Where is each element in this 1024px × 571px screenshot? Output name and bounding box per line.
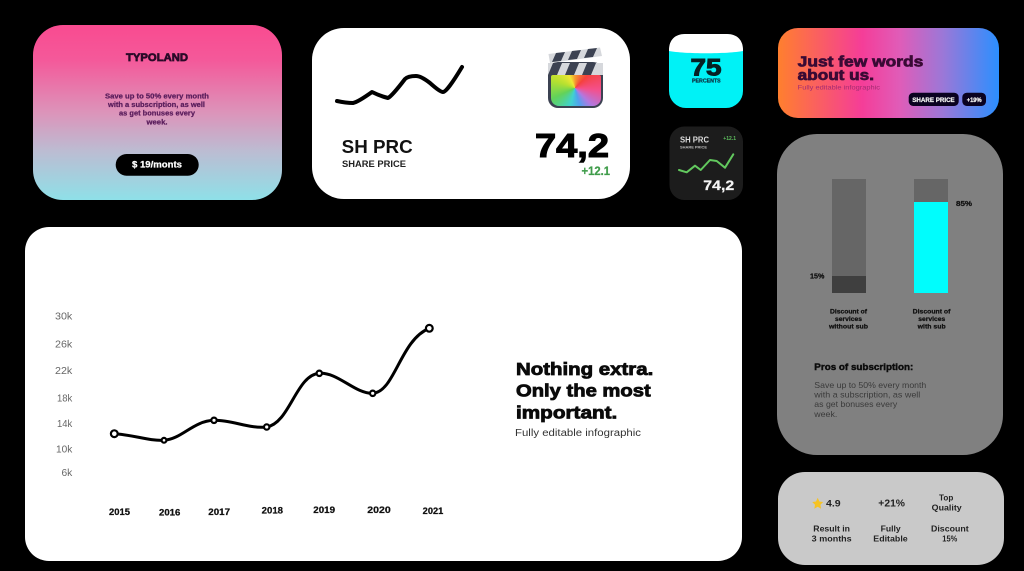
heading: nothing extra: Nothing extra.	[516, 359, 653, 379]
heading: nothing extra: Only the most	[516, 381, 651, 401]
stat: result	[812, 524, 852, 544]
ticker label: SHARE PRICE	[680, 146, 708, 150]
label: without sub: without sub	[828, 323, 868, 330]
x axis labels: 2020	[367, 505, 391, 515]
text block: pros: with a subscription, as well	[813, 390, 920, 400]
text block: pros: Save up to 50% every month	[814, 380, 927, 390]
y axis labels: 6k	[62, 467, 73, 479]
text block: subscription offer: Save up to 50% every month	[105, 92, 209, 100]
icon: clapperboard with colour wheel	[548, 48, 603, 108]
line series	[114, 328, 429, 440]
text block: pros: as get bonuses every	[814, 399, 898, 409]
pill: share price	[909, 93, 959, 106]
y axis labels: 10k	[56, 444, 73, 456]
y axis labels	[55, 310, 73, 479]
stat: top quality: Top	[939, 493, 953, 503]
label: without sub	[828, 309, 868, 330]
y axis labels: 26k	[55, 339, 73, 351]
ticker label	[680, 135, 709, 150]
panel: typoland pricing	[33, 25, 282, 200]
x axis labels: 2018	[262, 506, 283, 516]
bar: with sub 85%	[914, 179, 973, 293]
y axis labels: 22k	[55, 365, 73, 377]
panel: subscription bars	[777, 134, 1003, 455]
icon: star	[812, 498, 823, 509]
stat: discount	[931, 524, 969, 544]
panel: dark share price widget	[670, 126, 743, 200]
panel: about us gradient	[778, 28, 999, 118]
subheading: Fully editable infographic	[515, 428, 641, 439]
y axis labels: 14k	[57, 418, 73, 430]
stat: editable: Editable	[873, 534, 908, 544]
text block: subscription offer: as get bonuses every	[119, 109, 196, 118]
y axis labels: 18k	[57, 393, 73, 405]
x axis labels: 2016	[159, 508, 180, 518]
green sparkline	[679, 154, 733, 172]
stat: result: Result in	[813, 524, 850, 534]
stat: discount: 15%	[942, 534, 958, 544]
text block: pros: week.	[813, 409, 837, 419]
text block: pros	[813, 380, 927, 419]
text block: subscription offer: with a subscription, as well	[107, 100, 205, 109]
stat: top quality: Quality	[932, 503, 962, 513]
heading: just few words about us: Just few words	[798, 55, 923, 71]
panel: 75 percents	[669, 34, 743, 108]
heading: nothing extra	[516, 359, 653, 422]
heading: just few words about us: about us.	[798, 68, 874, 84]
value: 75: 75	[690, 54, 722, 82]
share price value: 74,2	[535, 127, 609, 164]
bar: without sub 15%	[810, 179, 866, 293]
ticker label	[342, 137, 413, 170]
x axis labels: 2017	[208, 507, 230, 517]
value: 74,2	[703, 177, 735, 193]
heading: nothing extra: important.	[516, 402, 617, 422]
bar: with sub 85%: 85%	[956, 201, 973, 208]
pill: +19%	[962, 93, 986, 106]
price button: $ 19/monts	[132, 160, 182, 170]
label: without sub: services	[835, 316, 862, 323]
subheading: Fully editable infographic	[798, 84, 881, 92]
heading: just few words about us	[798, 55, 923, 84]
y axis labels: 30k	[55, 310, 73, 322]
price button	[116, 154, 199, 176]
x axis labels	[109, 505, 443, 518]
label: without sub: Discount of	[830, 309, 868, 316]
x axis labels: 2015	[109, 507, 130, 517]
x axis labels: 2021	[423, 506, 443, 516]
panel: share price	[312, 28, 630, 199]
heading: pros of subscription: Pros of subscription:	[814, 362, 913, 373]
bar: without sub 15%: 15%	[810, 274, 825, 280]
panel: stats	[778, 472, 1004, 565]
pill: share price: SHARE PRICE	[912, 98, 955, 104]
heading: typoland: TYPOLAND	[126, 52, 188, 64]
label: with sub: services	[918, 316, 946, 323]
x axis labels: 2019	[313, 505, 335, 515]
ticker label: SH PRC	[342, 137, 413, 157]
panel: main line chart	[25, 227, 742, 561]
label: with sub: with sub	[917, 323, 946, 330]
stat: growth: +21%	[878, 499, 905, 510]
label: with sub: Discount of	[913, 309, 951, 316]
stat: rating: 4.9	[826, 498, 841, 510]
label: percents: PERCENTS	[692, 79, 721, 85]
data points	[111, 325, 433, 443]
price change: +12.1	[582, 164, 610, 178]
price change: +12.1	[723, 136, 736, 142]
ticker label: SH PRC	[680, 135, 709, 144]
label: with sub	[913, 309, 951, 330]
stat: discount: Discount	[931, 524, 969, 534]
line sparkline	[337, 67, 462, 103]
stat: editable: Fully	[881, 524, 901, 534]
stat: editable	[873, 524, 908, 544]
text block: subscription offer	[105, 92, 209, 126]
pill: +19%: +19%	[967, 98, 982, 104]
stat: result: 3 months	[812, 534, 852, 544]
ticker label: SHARE PRICE	[342, 159, 406, 170]
text block: subscription offer: week.	[145, 117, 168, 126]
stat: top quality	[932, 493, 962, 513]
